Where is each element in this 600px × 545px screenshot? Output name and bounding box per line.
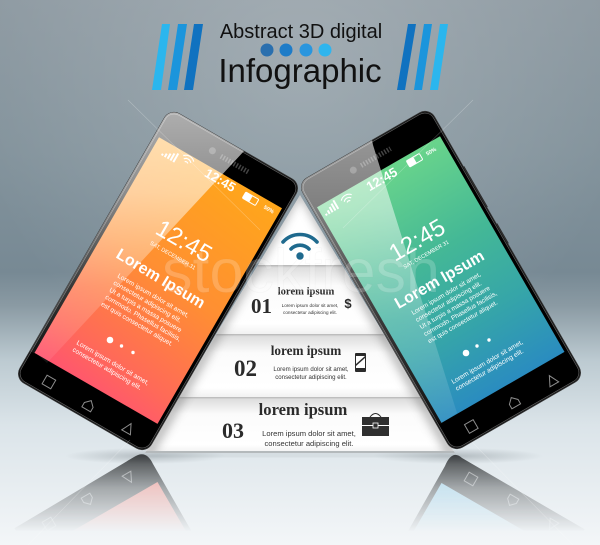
footer text: consectetur adipiscing elit. [71,347,143,392]
body text: Ut a turpis a massa posuere [419,285,492,331]
icon: dollar: $ [344,296,352,311]
status bar [161,146,275,216]
speaker [221,156,249,172]
status bar: 12:45 [364,164,400,194]
step 02: 02 [234,356,257,381]
step 01: lorem ipsum [278,286,334,298]
body text: consectetur adipiscing elit. [112,280,183,325]
status bar: 50% [425,147,438,157]
step 03: consectetur adipiscing elit. [264,439,354,448]
body text: Lorem ipsum dolor sit amet, [410,271,482,317]
status bar: 50% [262,205,275,216]
body text: commodo. Phasellus facilisis, [423,290,499,338]
body text: est quis consectetur aliquet. [427,299,499,345]
signal bars [321,200,339,216]
camera [349,165,358,175]
title dots [260,44,332,56]
step 03: 03 [222,418,244,443]
step 02 [234,343,366,381]
step 01: Lorem ipsum dolor sit amet, [282,303,338,308]
footer text: consectetur adipiscing elit. [454,348,525,393]
heading: Lorem Ipsum [113,246,208,312]
watermark [28,100,573,545]
body text: commodo. Phasellus facilisis, [104,294,182,343]
nav buttons [42,375,135,435]
screen [317,136,564,423]
pyramid bands [140,190,460,455]
title line two: Infographic [218,52,382,89]
footer text: Lorem ipsum dolor sit amet, [75,340,150,387]
step 03 [222,400,389,448]
body text: Lorem ipsum dolor sit amet, [116,273,190,319]
heading: Lorem Ipsum [392,248,488,313]
pager dots [107,337,135,354]
body text: consectetur adipiscing elit. [415,280,483,324]
date: SAT, DECEMBER 31 [149,241,196,272]
decorative bars: right [397,24,448,90]
screen glass reflection [302,140,457,424]
side buttons [463,166,509,244]
phone: left [12,100,302,454]
screen glass reflection [30,112,244,363]
reflection: left phone [18,454,188,527]
body text: Ut a turpis a massa posuere [108,287,183,334]
icon: wifi [283,234,317,260]
wifi small [340,192,354,205]
step 02: Lorem ipsum dolor sit amet, [273,366,349,373]
body text: est quis consectetur aliquet. [100,301,174,348]
pager dots [463,338,491,356]
icon: briefcase [362,414,389,436]
phone body [14,108,302,454]
phone: right [290,107,585,453]
nav buttons [464,373,559,433]
title [218,21,382,89]
step 03: Lorem ipsum dolor sit amet, [262,429,356,438]
battery [242,192,259,206]
wifi small [181,153,195,166]
step 01 [251,286,352,318]
pyramid infographic [140,190,460,455]
status bar [321,147,438,216]
step 01: 01 [251,294,272,318]
date: SAT, DECEMBER 31 [403,240,450,271]
footer text: Lorem ipsum dolor sit amet, [450,339,525,386]
step 03: lorem ipsum [259,400,347,419]
icon: phone [355,353,366,372]
decorative bars: left [152,24,203,90]
speaker [361,149,391,166]
floor shadows [65,448,543,464]
step 02: lorem ipsum [271,343,341,358]
watermark: stockfresh [162,237,440,305]
status bar: 12:45 [202,165,238,195]
battery [406,153,423,167]
signal bars [161,146,179,163]
screen [35,137,282,424]
pyramid base [145,195,455,453]
step 01: consectetur adipiscing elit. [283,310,337,315]
clock: 12:45 [384,214,450,267]
clock: 12:45 [151,215,217,268]
camera [208,146,217,156]
phone body [297,107,585,453]
reflection: right phone [411,454,580,527]
title line one: Abstract 3D digital [220,21,382,43]
step 02: consectetur adipiscing elit. [275,374,347,381]
